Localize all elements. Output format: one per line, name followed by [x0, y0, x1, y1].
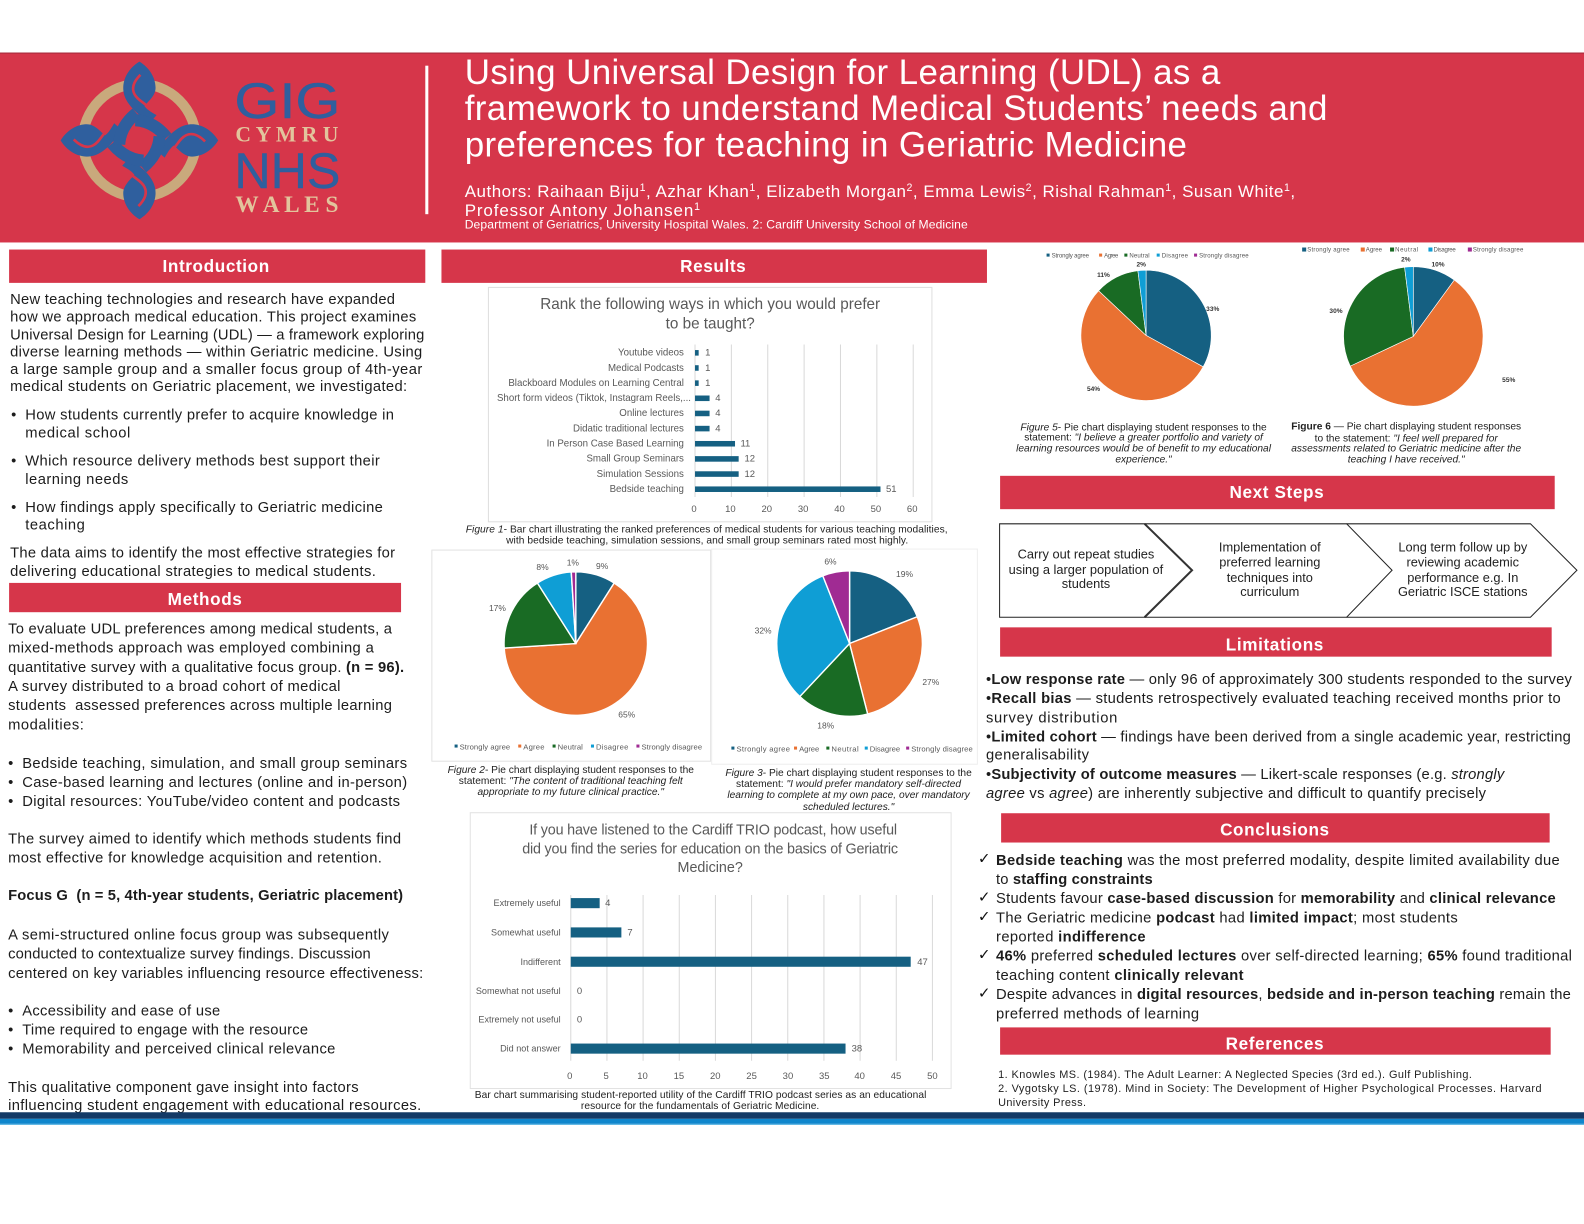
chevron: step 2: techniques into [1227, 570, 1313, 585]
introduction text: • [11, 454, 16, 470]
conclusions text: ✓ [978, 946, 991, 964]
pie chart: figure 5: Strongly disagree [1199, 254, 1249, 260]
bar chart: figure 1 teaching preferences: 1 [705, 363, 710, 374]
authors: 1 [694, 201, 700, 213]
methods text: conducted to contextualize survey findings. Discussion [8, 947, 371, 963]
footer band [0, 1112, 1584, 1125]
logo wordmark [234, 72, 340, 218]
pie chart: figure 6: 55% [1502, 377, 1515, 384]
methods text: centered on key variables influencing resource effectiveness: [8, 966, 423, 982]
pie chart: figure 3: 19% [896, 569, 913, 579]
bar chart: figure 4 Cardiff TRIO podcast usefulness: 25 [746, 1071, 757, 1082]
introduction text: How students currently prefer to acquire knowledge in [25, 407, 394, 423]
methods text: • [8, 1003, 13, 1019]
title: framework to understand Medical Students’ needs and [465, 89, 1327, 128]
caption: figure 1 [466, 524, 948, 547]
pie chart: figure 2: 65% [618, 709, 636, 719]
pie chart: figure 2: Disagree [596, 743, 628, 752]
pie chart: figure 6 [1302, 248, 1524, 406]
bar chart: figure 1 teaching preferences: 0 [691, 504, 697, 515]
conclusions text: ✓ [978, 888, 991, 906]
pie chart: figure 3: 6% [824, 557, 837, 567]
methods text: • [8, 756, 13, 772]
bar chart: figure 1 teaching preferences: Youtube videos [618, 348, 684, 359]
conclusions text [978, 850, 1572, 1022]
caption: figure 6 [1291, 421, 1521, 466]
caption: figure 2: statement: "The content of traditional teaching felt [459, 776, 684, 787]
logo wordmark: W A L E S [235, 192, 338, 218]
methods text: Bedside teaching, simulation, and small group seminars [22, 756, 407, 772]
methods text: Time required to engage with the resource [22, 1022, 308, 1038]
caption: figure 4: Bar chart summarising student-reported utility of the Cardiff TRIO podcast series as an educational [475, 1090, 926, 1101]
pie chart: figure 5: Disagree [1162, 254, 1189, 260]
caption: figure 5: statement: "I believe a greater portfolio and variety of [1024, 432, 1264, 443]
bar chart: figure 4 Cardiff TRIO podcast usefulness: Did not answer [500, 1044, 561, 1054]
introduction text: learning needs [25, 472, 128, 488]
chevron: step 1: students [1062, 576, 1110, 591]
heading: methods: Methods [168, 589, 242, 609]
bar chart: figure 1 teaching preferences: 11 [740, 439, 750, 450]
bar chart: figure 4 Cardiff TRIO podcast usefulness: 15 [674, 1071, 684, 1082]
caption: figure 5: experience." [1115, 455, 1172, 466]
limitations text: •Low response rate — only 96 of approximately 300 students responded to the survey [986, 672, 1573, 688]
authors: 1 [749, 182, 755, 194]
caption: figure 3 [725, 768, 972, 813]
chevron: step 2: curriculum [1240, 584, 1299, 599]
bar chart: figure 4 Cardiff TRIO podcast usefulness: 38 [852, 1044, 862, 1055]
chevron: step 2 [1145, 524, 1392, 617]
pie chart: figure 2: 17% [489, 603, 506, 613]
authors: 2 [907, 182, 913, 194]
conclusions text: Students favour case-based discussion for memorability and clinical relevance [996, 891, 1556, 907]
bar chart: figure 1 teaching preferences: 20 [761, 504, 772, 515]
reference list [998, 1069, 1542, 1109]
logo wordmark: C Y M R U [235, 121, 338, 146]
chevron: step 3: Geriatric ISCE stations [1398, 584, 1528, 599]
pie chart: figure 3 [712, 549, 977, 764]
bar chart: figure 1 teaching preferences: 12 [745, 469, 755, 480]
title: Using Universal Design for Learning (UDL) as a [465, 53, 1221, 92]
methods text: influencing student engagement with educational resources. [8, 1098, 421, 1114]
header banner [0, 53, 1584, 242]
methods text: modalities: [8, 717, 84, 733]
pie chart: figure 2 [432, 550, 711, 761]
bar chart: figure 4 Cardiff TRIO podcast usefulness: Extremely useful [494, 898, 561, 908]
bar chart: figure 1 teaching preferences: Online lectures [619, 408, 684, 419]
caption: figure 2: Figure 2- Pie chart displaying student responses to the [448, 765, 694, 776]
bar chart: figure 4 Cardiff TRIO podcast usefulness: 0 [577, 1014, 582, 1025]
bar chart: figure 4 Cardiff TRIO podcast usefulness: 4 [605, 898, 610, 909]
chevron: step 2: Implementation of [1219, 540, 1321, 555]
methods text: Focus G (n = 5, 4th-year students, Geriatric placement) [8, 888, 403, 904]
introduction text: Universal Design for Learning (UDL) — a framework exploring [10, 327, 424, 343]
heading: next steps: Next Steps [1230, 482, 1324, 502]
methods text: • [8, 794, 13, 810]
bar chart: figure 1 teaching preferences: Medical Podcasts [608, 363, 684, 374]
heading: limitations: Limitations [1226, 635, 1324, 655]
authors: , Rishal Rahman [1032, 182, 1165, 201]
caption: figure 5: Figure 5- Pie chart displaying student responses to the [1020, 422, 1267, 433]
authors [465, 182, 1295, 231]
heading: conclusions: Conclusions [1220, 819, 1330, 839]
methods text: quantitative survey with a qualitative focus group. (n = 96). [8, 660, 404, 676]
conclusions text: ✓ [978, 907, 991, 925]
methods text: • [8, 1022, 13, 1038]
pie chart: figure 5: 54% [1087, 386, 1100, 393]
introduction text: a large sample group and a smaller focus group of 4th-year [10, 362, 422, 378]
bar chart: figure 1 teaching preferences: to be taught? [666, 315, 755, 332]
caption: figure 6: assessments related to Geriatric medicine after the [1291, 444, 1521, 455]
logo wordmark: GIG [234, 72, 340, 129]
authors: Department of Geriatrics, University Hospital Wales. 2: Cardiff University School of Medicine [465, 217, 968, 231]
chevron: step 3 [1347, 524, 1577, 617]
title: preferences for teaching in Geriatric Medicine [465, 126, 1187, 165]
pie chart: figure 5: 33% [1206, 306, 1219, 313]
conclusions text: Despite advances in digital resources, bedside and in-person teaching remain the [996, 987, 1571, 1003]
bar chart: figure 1 teaching preferences: 1 [705, 348, 710, 359]
bar chart: figure 1 teaching preferences: 4 [715, 393, 721, 404]
chevron: step 3: Long term follow up by [1398, 540, 1528, 555]
bar chart: figure 4 Cardiff TRIO podcast usefulness [470, 813, 951, 1089]
introduction text: delivering educational strategies to medical students. [10, 564, 376, 580]
pie chart: figure 6: 10% [1431, 262, 1445, 269]
authors: , Azhar Khan [646, 182, 749, 201]
pie chart: figure 2: 8% [536, 562, 549, 572]
bar chart: figure 1 teaching preferences: 40 [834, 504, 845, 515]
reference list: 2. Vygotsky LS. (1978). Mind in Society: The Development of Higher Psychological Processes. Harvard [998, 1083, 1542, 1095]
pie chart: figure 6: 2% [1401, 257, 1411, 264]
chevron: step 2: preferred learning [1219, 555, 1320, 570]
introduction text: How findings apply specifically to Geriatric medicine [25, 500, 383, 516]
caption: figure 3: scheduled lectures." [803, 802, 895, 813]
reference list: University Press. [998, 1097, 1086, 1109]
methods text: • [8, 775, 13, 791]
methods text [8, 621, 423, 1114]
bar chart: figure 4 Cardiff TRIO podcast usefulness: 5 [603, 1071, 609, 1082]
methods text: Case-based learning and lectures (online and in-person) [22, 775, 407, 791]
bar chart: figure 4 Cardiff TRIO podcast usefulness: did you find the series for education on the basics of Geriatric [522, 842, 898, 858]
pie chart: figure 3: 27% [922, 677, 940, 687]
introduction text [10, 292, 424, 580]
authors: Professor Antony Johansen [465, 201, 693, 220]
caption: figure 1: with bedside teaching, simulation sessions, and small group seminars rated most highly. [505, 536, 908, 547]
panel: introduction [9, 250, 425, 580]
pie chart: figure 5: Agree [1104, 254, 1119, 260]
reference list: 1. Knowles MS. (1984). The Adult Learner: A Neglected Species (3rd ed.). Gulf Publishing. [998, 1069, 1472, 1081]
pie chart: figure 5: Strongly agree [1052, 254, 1090, 260]
authors: 2 [1026, 182, 1032, 194]
introduction text: The data aims to identify the most effective strategies for [10, 546, 395, 562]
introduction text: • [11, 407, 16, 423]
pie chart: figure 3: Neutral [831, 745, 859, 754]
authors: 1 [1165, 182, 1171, 194]
bar chart: figure 1 teaching preferences: Simulation Sessions [597, 469, 684, 480]
caption: figure 5: learning resources would be of benefit to my educational [1016, 444, 1272, 455]
pie chart: figure 2: Agree [523, 743, 544, 752]
bar chart: figure 4 Cardiff TRIO podcast usefulness: 45 [891, 1071, 901, 1082]
heading: results [441, 250, 987, 283]
bar chart: figure 4 Cardiff TRIO podcast usefulness: 10 [637, 1071, 648, 1082]
caption: figure 2 [448, 765, 694, 798]
bar chart: figure 1 teaching preferences: 4 [715, 423, 721, 434]
chevron: step 1: Carry out repeat studies [1018, 547, 1154, 562]
introduction text: medical school [25, 425, 130, 441]
pie chart: figure 5 [1047, 254, 1249, 401]
bar chart: figure 1 teaching preferences: Blackboard Modules on Learning Central [508, 378, 684, 389]
pie chart: figure 2: 1% [567, 558, 579, 568]
pie chart: figure 2: 9% [596, 561, 609, 571]
pie chart: figure 3: Agree [799, 745, 819, 754]
pie chart: figure 6: 30% [1329, 308, 1343, 315]
caption: figure 6: to the statement: "I feel well prepared for [1315, 433, 1498, 444]
pie chart: figure 6: Agree [1366, 248, 1383, 254]
pie chart: figure 3: Strongly agree [736, 745, 790, 754]
authors: , [1290, 182, 1295, 201]
bar chart: figure 4 Cardiff TRIO podcast usefulness: 20 [710, 1071, 721, 1082]
pie chart: figure 5: 2% [1136, 262, 1146, 269]
bar chart: figure 1 teaching preferences: Rank the following ways in which you would prefer [540, 296, 880, 313]
bar chart: figure 4 Cardiff TRIO podcast usefulness: If you have listened to the Cardiff TRIO podcast, how useful [529, 822, 897, 838]
authors: 1 [1284, 182, 1290, 194]
icon: NHS Wales celtic knot logo [61, 62, 218, 219]
heading: references: References [1226, 1034, 1324, 1054]
caption: figure 3: Figure 3- Pie chart displaying student responses to the [725, 768, 972, 779]
limitations text: survey distribution [986, 710, 1117, 726]
pie chart: figure 3: Disagree [870, 745, 900, 754]
bar chart: figure 1 teaching preferences: Small Group Seminars [586, 454, 684, 465]
methods text: Digital resources: YouTube/video content and podcasts [22, 794, 400, 810]
introduction text: teaching [25, 517, 85, 533]
limitations text [986, 672, 1573, 802]
title [465, 53, 1327, 165]
methods text: • [8, 1042, 13, 1058]
chevron: step 3: reviewing academic [1407, 555, 1520, 570]
conclusions text: teaching content clinically relevant [996, 968, 1244, 984]
bar chart: figure 4 Cardiff TRIO podcast usefulness: Indifferent [520, 957, 561, 967]
conclusions text: preferred methods of learning [996, 1006, 1199, 1022]
chevron: step 3: performance e.g. In [1407, 570, 1518, 585]
introduction text: medical students on Geriatric placement, we investigated: [10, 379, 407, 395]
pie chart: figure 6: Strongly agree [1307, 248, 1350, 254]
introduction text: New teaching technologies and research have expanded [10, 292, 395, 308]
panel: next steps [1000, 476, 1577, 617]
pie chart: figure 2: Strongly disagree [641, 743, 702, 752]
bar chart: figure 4 Cardiff TRIO podcast usefulness: 0 [567, 1071, 572, 1082]
caption: figure 1: Figure 1- Bar chart illustrating the ranked preferences of medical students for various teaching modalities, [466, 524, 948, 535]
bar chart: figure 1 teaching preferences: 1 [705, 378, 710, 389]
pie chart: figure 2: Neutral [558, 743, 583, 752]
bar chart: figure 4 Cardiff TRIO podcast usefulness: 35 [819, 1071, 830, 1082]
bar chart: figure 1 teaching preferences: Bedside teaching [610, 484, 684, 495]
pie chart: figure 3: 32% [755, 625, 772, 635]
authors: , Susan White [1172, 182, 1283, 201]
methods text: students assessed preferences across multiple learning [8, 698, 392, 714]
logo wordmark: NHS [234, 142, 340, 199]
bar chart: figure 1 teaching preferences: In Person Case Based Learning [547, 439, 684, 450]
bar chart: figure 4 Cardiff TRIO podcast usefulness: 30 [783, 1071, 793, 1082]
bar chart: figure 1 teaching preferences [488, 287, 932, 522]
pie chart: figure 5: 11% [1097, 272, 1110, 279]
bar chart: figure 1 teaching preferences: 4 [715, 408, 721, 419]
caption: figure 6: Figure 6 — Pie chart displaying student responses [1291, 421, 1521, 432]
bar chart: figure 1 teaching preferences: 51 [886, 484, 897, 495]
methods text: A semi-structured online focus group was subsequently [8, 928, 390, 944]
heading: introduction [9, 250, 425, 283]
bar chart: figure 4 Cardiff TRIO podcast usefulness: 50 [927, 1071, 938, 1082]
panel: references [998, 1027, 1551, 1109]
heading: next steps [1000, 476, 1555, 509]
caption: figure 2: appropriate to my future clinical practice." [478, 787, 664, 798]
heading: limitations [1000, 627, 1552, 657]
panel: conclusions [978, 813, 1572, 1022]
methods text: This qualitative component gave insight into factors [8, 1080, 359, 1096]
methods text: most effective for knowledge acquisition and retention. [8, 851, 382, 867]
pie chart: figure 2: Strongly agree [460, 743, 510, 752]
panel: methods [8, 583, 423, 1114]
pie chart: figure 3: Strongly disagree [911, 745, 973, 754]
pie chart: figure 6: Disagree [1433, 248, 1456, 254]
authors: 1 [640, 182, 646, 194]
introduction text: • [11, 500, 16, 516]
caption: figure 3: learning to complete at my own pace, over mandatory [727, 790, 971, 801]
introduction text: Which resource delivery methods best support their [25, 454, 380, 470]
bar chart: figure 1 teaching preferences: Short form videos (Tiktok, Instagram Reels,... [497, 393, 691, 404]
panel: results [432, 250, 987, 1112]
methods text: The survey aimed to identify which methods students find [8, 832, 401, 848]
bar chart: figure 4 Cardiff TRIO podcast usefulness: Somewhat useful [491, 927, 561, 937]
chevron: step 1 [1000, 524, 1192, 617]
bar chart: figure 1 teaching preferences: 50 [871, 504, 881, 515]
pie chart: figure 3: 18% [817, 720, 835, 730]
caption: figure 6: teaching I have received." [1348, 455, 1465, 466]
conclusions text: Bedside teaching was the most preferred modality, despite limited availability due [996, 853, 1560, 869]
bar chart: figure 1 teaching preferences: Didatic traditional lectures [573, 423, 684, 434]
bar chart: figure 4 Cardiff TRIO podcast usefulness: 7 [627, 927, 633, 938]
bar chart: figure 4 Cardiff TRIO podcast usefulness: Medicine? [678, 860, 743, 876]
conclusions text: ✓ [978, 984, 991, 1002]
caption: figure 4: resource for the fundamentals of Geriatric Medicine. [581, 1101, 819, 1112]
authors: , Elizabeth Morgan [756, 182, 906, 201]
methods text: A survey distributed to a broad cohort of medical [8, 679, 340, 695]
bar chart: figure 4 Cardiff TRIO podcast usefulness: 47 [917, 957, 928, 968]
bar chart: figure 1 teaching preferences: 10 [725, 504, 736, 515]
heading: references [1000, 1027, 1551, 1055]
limitations text: •Limited cohort — findings have been derived from a single academic year, restricting [986, 730, 1571, 746]
methods text: Memorability and perceived clinical relevance [22, 1042, 335, 1058]
bar chart: figure 1 teaching preferences: 12 [745, 454, 755, 465]
caption: figure 3: statement: "I would prefer mandatory self-directed [736, 779, 961, 790]
methods text: To evaluate UDL preferences among medical students, a [8, 621, 393, 637]
methods text: mixed-methods approach was employed combining a [8, 641, 375, 657]
pie chart: figure 5: Neutral [1129, 254, 1150, 260]
bar chart: figure 4 Cardiff TRIO podcast usefulness: Extremely not useful [478, 1014, 561, 1024]
heading: introduction: Introduction [163, 256, 270, 276]
methods text: Accessibility and ease of use [22, 1003, 220, 1019]
introduction text: how we approach medical education. This project examines [10, 309, 416, 325]
caption: figure 5 [1016, 422, 1272, 466]
authors: , Emma Lewis [913, 182, 1025, 201]
heading: results: Results [680, 256, 746, 276]
limitations text: generalisability [986, 748, 1090, 764]
bar chart: figure 1 teaching preferences: 30 [798, 504, 808, 515]
conclusions text: to staffing constraints [996, 872, 1153, 888]
caption: figure 4 [475, 1090, 926, 1112]
heading: conclusions [1001, 813, 1550, 843]
limitations text: •Subjectivity of outcome measures — Likert-scale responses (e.g. strongly [986, 767, 1506, 783]
bar chart: figure 4 Cardiff TRIO podcast usefulness: Somewhat not useful [476, 986, 561, 996]
conclusions text: The Geriatric medicine podcast had limited impact; most students [996, 910, 1458, 926]
pie chart: figure 6: Strongly disagree [1473, 248, 1524, 254]
bar chart: figure 1 teaching preferences: 60 [907, 504, 917, 515]
limitations text: •Recall bias — students retrospectively evaluated teaching received months prior to [986, 691, 1561, 707]
conclusions text: 46% preferred scheduled lectures over self-directed learning; 65% found traditional [996, 949, 1572, 965]
pie chart: figure 6: Neutral [1395, 248, 1418, 254]
conclusions text: reported indifference [996, 930, 1146, 946]
conclusions text: ✓ [978, 850, 991, 868]
heading: methods [9, 583, 401, 612]
authors: Authors: Raihaan Biju [465, 182, 639, 201]
limitations text: agree vs agree) are inherently subjective and difficult to quantify precisely [986, 786, 1487, 802]
chevron: step 1: using a larger population of [1009, 562, 1164, 577]
bar chart: figure 4 Cardiff TRIO podcast usefulness: 0 [577, 986, 582, 997]
introduction text: diverse learning methods — within Geriatric medicine. Using [10, 345, 422, 361]
panel: limitations [986, 627, 1573, 802]
bar chart: figure 4 Cardiff TRIO podcast usefulness: 40 [854, 1071, 865, 1082]
